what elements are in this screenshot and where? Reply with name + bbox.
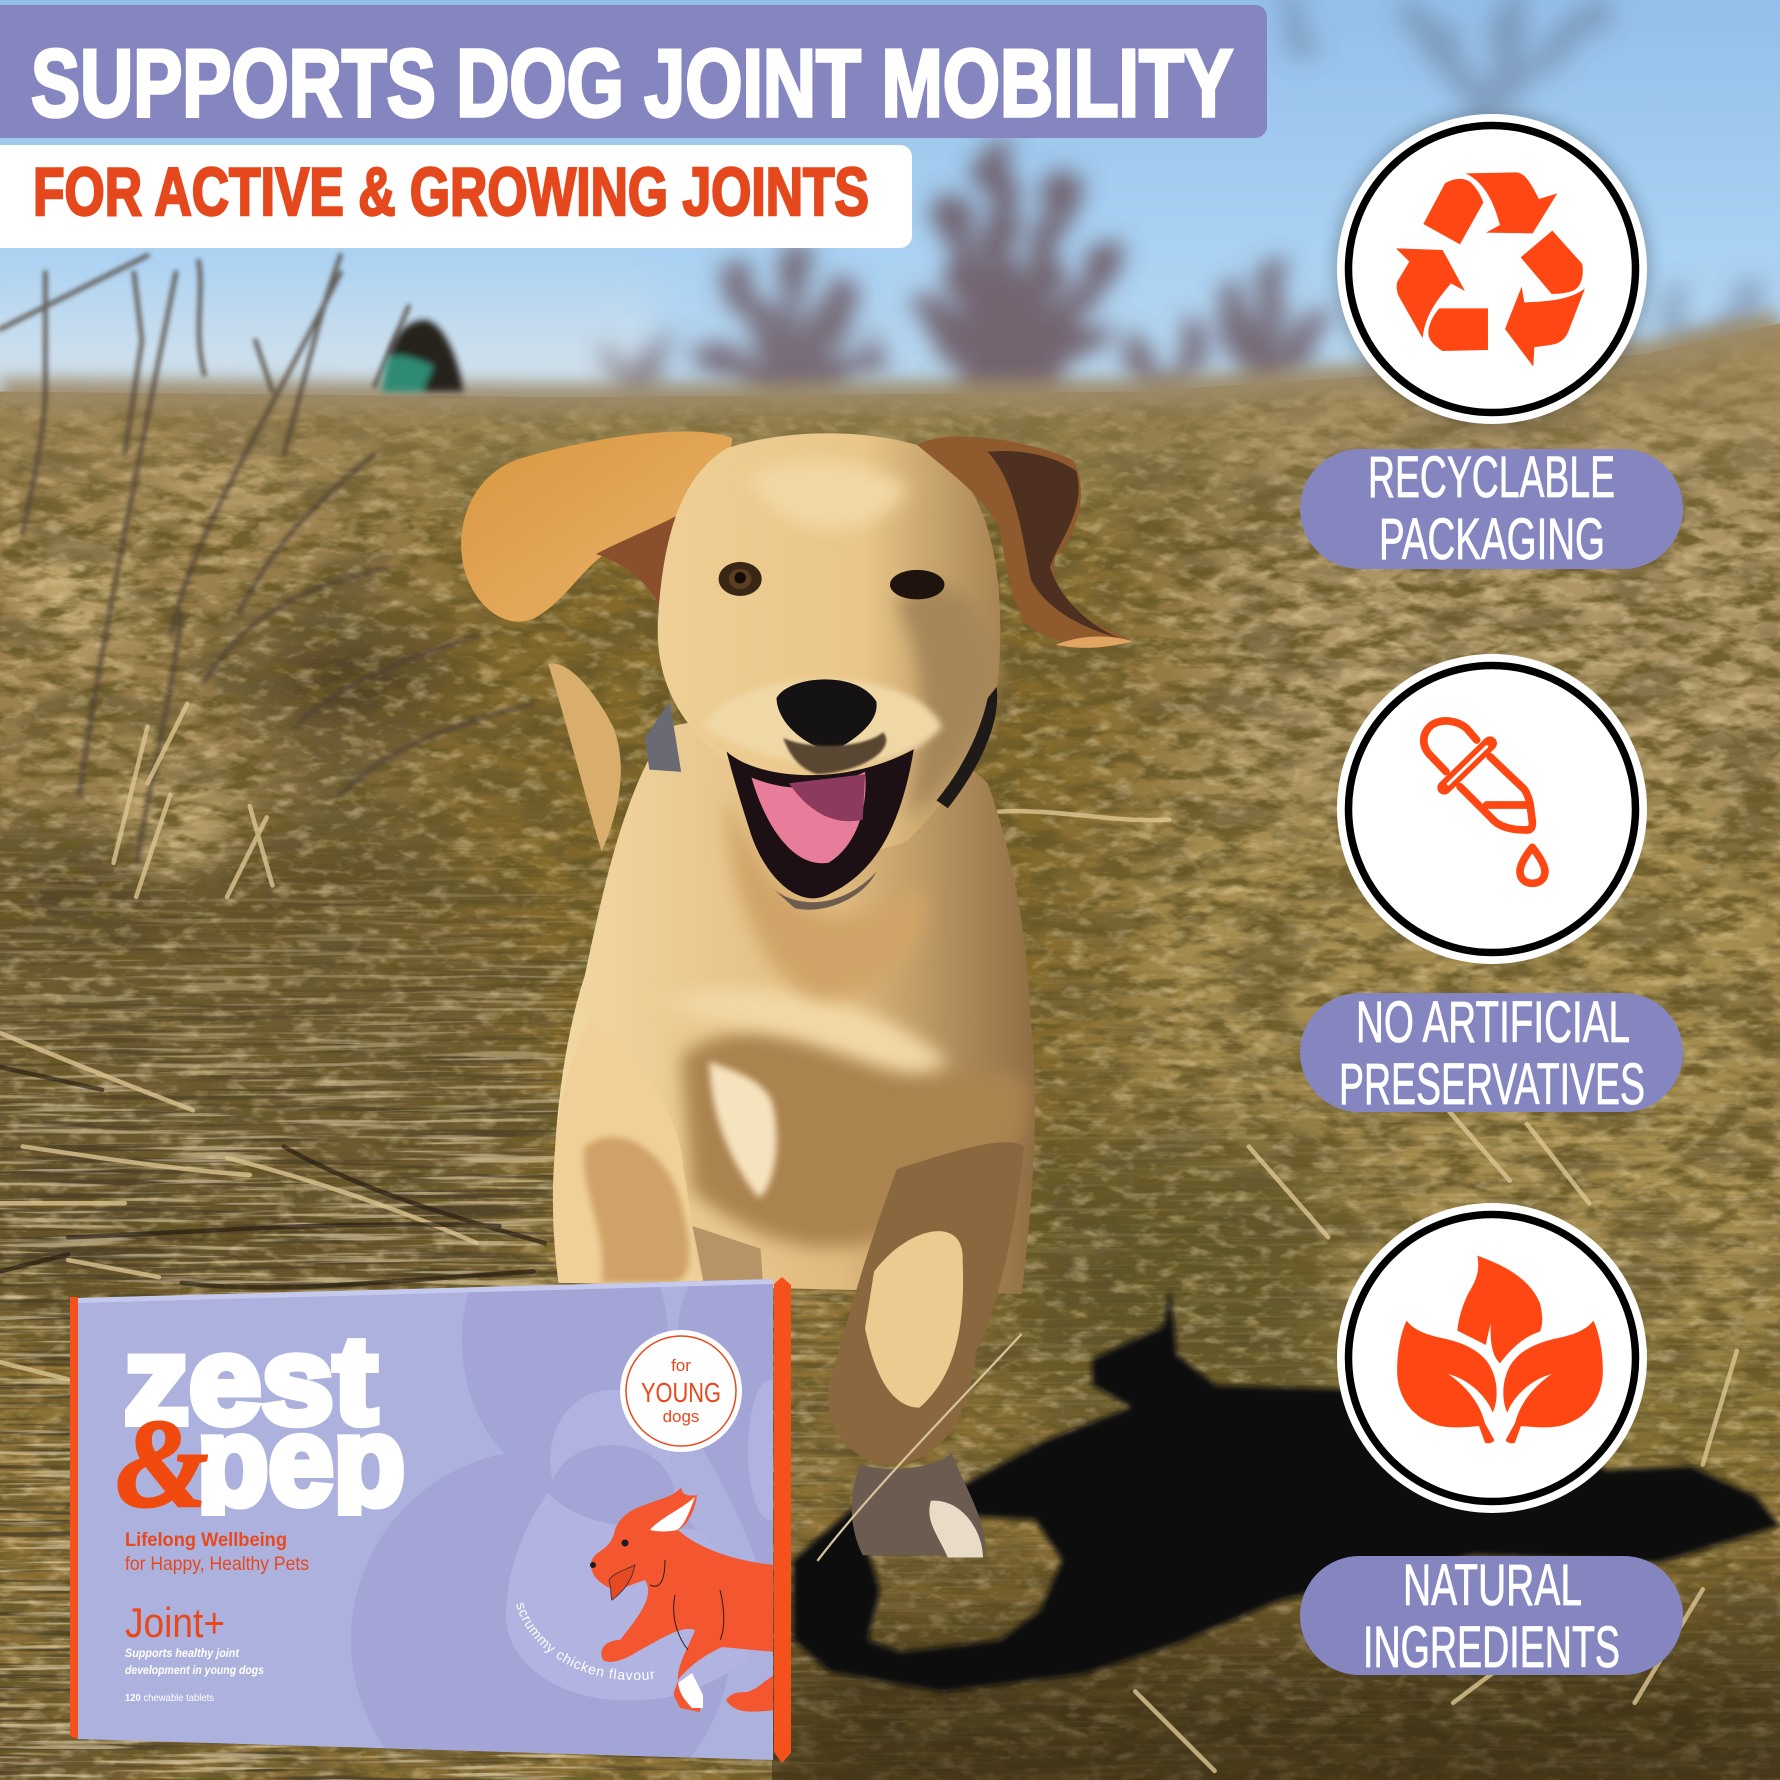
logo wordmark: pep: [197, 1393, 405, 1531]
box front face: [78, 1279, 773, 1760]
tagline: for Happy, Healthy Pets: [125, 1554, 309, 1575]
logo wordmark: &: [116, 1395, 208, 1534]
product description: development in young dogs: [125, 1663, 264, 1677]
badge: natural ingredients: [1300, 1203, 1683, 1680]
natural label pill: [1300, 1553, 1683, 1680]
recyclable label pill: [1300, 445, 1683, 572]
body: [554, 713, 1035, 1294]
dropper icon circle: [1337, 654, 1647, 964]
title: SUPPORTS DOG JOINT MOBILITY: [31, 30, 1233, 137]
for young dogs badge: for: [671, 1356, 691, 1375]
pale dry grass clumps: [23, 454, 295, 880]
recyclable label pill: PACKAGING: [1379, 507, 1605, 572]
foreground bare stems: [0, 255, 534, 863]
product name: Joint+: [125, 1599, 225, 1646]
subtitle: FOR ACTIVE & GROWING JOINTS: [33, 154, 869, 230]
left ear: [461, 432, 732, 622]
muzzle: [704, 680, 942, 765]
recycle icon circle: [1334, 111, 1650, 427]
mouth: [727, 749, 914, 898]
collar: [937, 687, 997, 808]
logo wordmark: zest: [124, 1312, 377, 1450]
front left leg: [553, 1022, 704, 1283]
box pattern shapes: [351, 1279, 773, 1758]
head: [658, 433, 1000, 850]
badge: recyclable packaging: [1300, 111, 1683, 572]
tongue: [752, 772, 866, 863]
natural label pill: INGREDIENTS: [1363, 1615, 1620, 1680]
badge: no artificial preservatives: [1300, 654, 1683, 1117]
dog: [461, 432, 1133, 1557]
depth of field near the horizon: [0, 324, 1780, 498]
leaves icon circle: [1337, 1203, 1647, 1513]
for young dogs badge: YOUNG: [641, 1377, 721, 1408]
flavour text on curve: [516, 1604, 690, 1680]
illustrated dog on box: [590, 1487, 775, 1712]
nose: [776, 679, 877, 752]
right ear: [917, 437, 1133, 646]
face shadow: [897, 587, 999, 817]
tagline: [125, 1530, 309, 1575]
grass stalk over paw: [817, 1334, 1022, 1561]
box left edge: [70, 1297, 78, 1739]
chest shadow: [681, 1030, 1027, 1247]
headline banner: [0, 5, 1267, 138]
tablet count: 120 chewable tablets: [125, 1692, 214, 1704]
product description: Supports healthy joint: [125, 1646, 240, 1660]
product box: scrummy chicken flavour: [516, 1602, 654, 1680]
product box: [70, 1277, 791, 1763]
straw strands: [0, 704, 1737, 1771]
natural label pill: NATURAL: [1403, 1553, 1582, 1618]
front right leg and paw: [828, 1142, 1024, 1464]
subtitle banner: [0, 145, 912, 248]
far leg: [692, 1226, 763, 1283]
tagline: Lifelong Wellbeing: [125, 1530, 287, 1551]
for young dogs badge: dogs: [663, 1407, 699, 1426]
logo wordmark: [118, 1338, 404, 1516]
for young dogs badge: [620, 1330, 742, 1452]
distant figure: [381, 320, 463, 392]
eyes: [719, 562, 762, 596]
distant bare trees: [607, 0, 1754, 397]
preservatives label pill: NO ARTIFICIAL: [1356, 990, 1630, 1055]
recyclable label pill: RECYCLABLE: [1368, 445, 1615, 510]
tail: [548, 663, 621, 851]
box right spine: [774, 1277, 791, 1763]
dog shadow: [793, 1287, 1780, 1692]
preservatives label pill: [1300, 990, 1683, 1117]
product description: [125, 1646, 264, 1677]
